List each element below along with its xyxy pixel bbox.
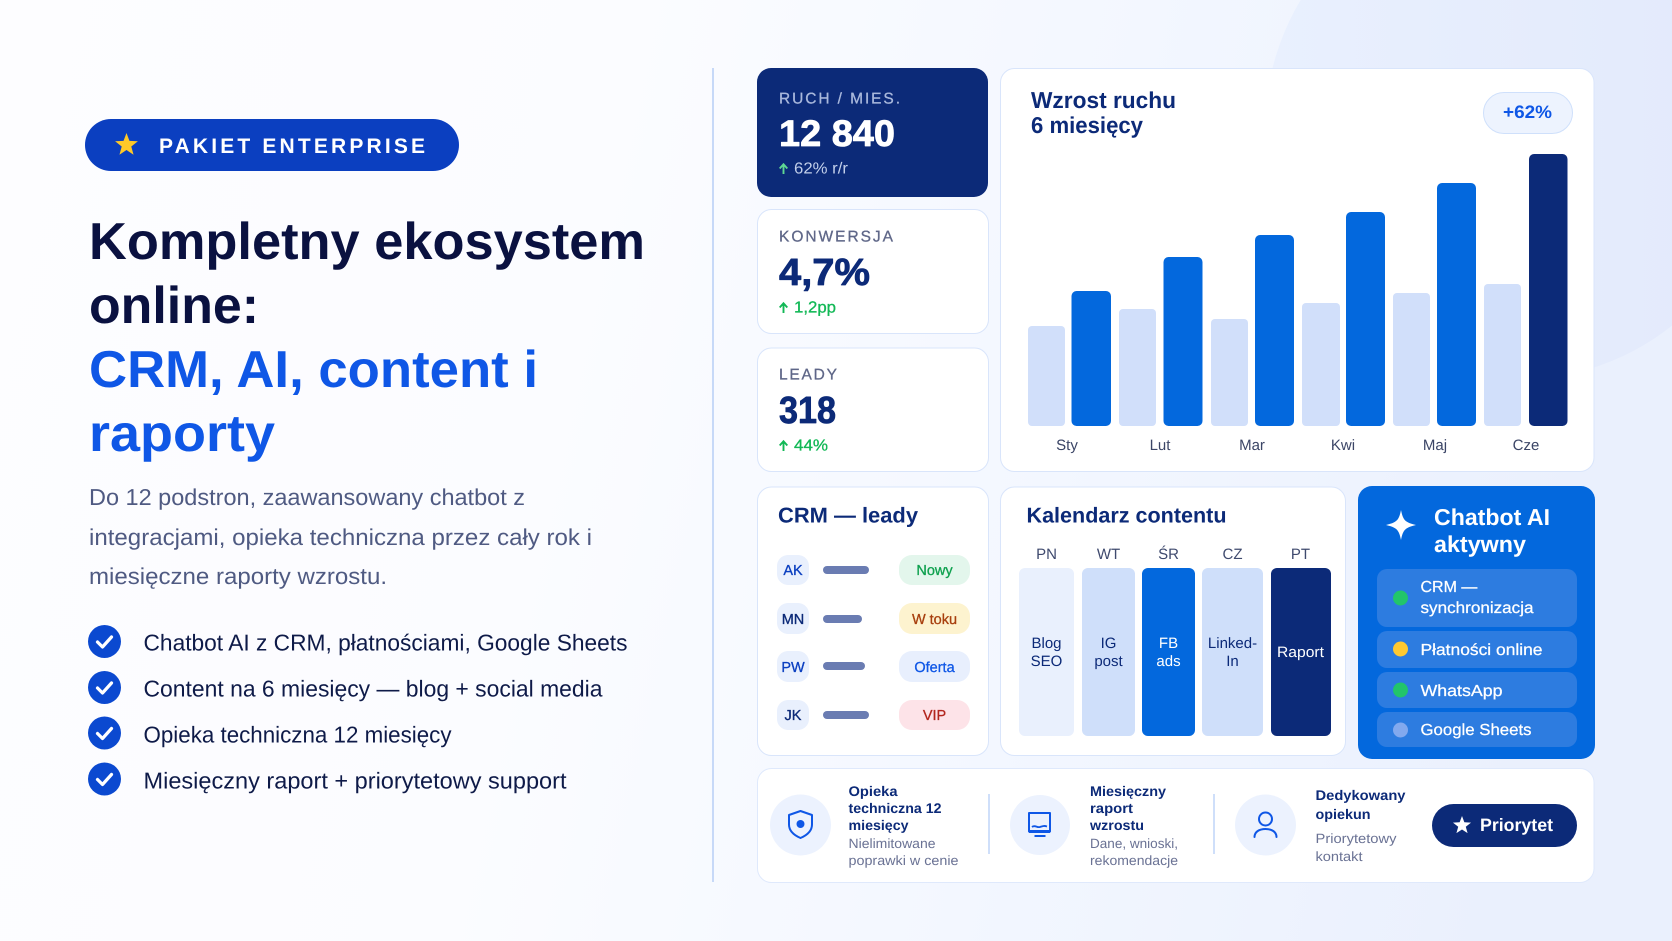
growth badge — [1484, 92, 1572, 134]
service: technical care: miesięcy — [848, 817, 909, 833]
column: IG post — [1082, 568, 1135, 736]
item: raport — [88, 762, 567, 796]
integration: payments — [1377, 631, 1577, 668]
column: Blog SEO: Blog — [1031, 635, 1062, 652]
integration: WhatsApp — [1377, 672, 1577, 708]
panel: CRM leads — [758, 487, 988, 756]
service: dedicated manager: opiekun — [1316, 806, 1370, 822]
weekday labels: PT — [1291, 546, 1310, 563]
KPI card: konwersja — [758, 210, 988, 334]
lead row AK — [777, 555, 970, 585]
item: chatbot: Chatbot AI z CRM, płatnościami, Google Sheets — [144, 630, 628, 656]
chatbot heading: aktywny — [1434, 531, 1526, 557]
integration: WhatsApp: WhatsApp — [1420, 683, 1503, 700]
KPI card: konwersja: 1,2pp — [794, 300, 836, 316]
service: monthly report: raport — [1090, 800, 1133, 816]
chart month labels: Lut — [1150, 437, 1171, 454]
chatbot heading — [1434, 504, 1550, 557]
chart heading: Wzrost ruchu — [1031, 87, 1176, 113]
chart month labels: Kwi — [1331, 437, 1355, 454]
description paragraph: miesięczne raporty wzrostu. — [89, 563, 387, 589]
lead row PW — [777, 651, 970, 682]
item: opieka: Opieka techniczna 12 miesięcy — [144, 722, 452, 748]
title: CRM, AI, content i — [89, 341, 538, 399]
service: monthly report: Miesięczny — [1090, 783, 1166, 799]
icon: person — [1254, 812, 1276, 837]
title — [89, 213, 645, 463]
service: technical care: techniczna 12 — [848, 800, 942, 816]
KPI card: leady: LEADY — [779, 366, 837, 384]
icon: sparkle — [1386, 510, 1416, 540]
badge: Pakiet Enterprise: PAKIET ENTERPRISE — [159, 135, 425, 158]
service: dedicated manager: Priorytetowy — [1316, 831, 1397, 846]
integration: Google Sheets: Google Sheets — [1420, 722, 1532, 739]
chart month labels: Cze — [1513, 437, 1539, 454]
column: FB ads: ads — [1156, 653, 1181, 670]
service: technical care: poprawki w cenie — [848, 853, 958, 868]
icon: gold star — [115, 133, 138, 155]
column: FB ads: FB — [1159, 635, 1178, 652]
column: Blog SEO: SEO — [1031, 653, 1062, 670]
KPI card: leady: 44% — [794, 438, 828, 454]
weekday labels: CZ — [1222, 546, 1242, 563]
panel: traffic growth chart — [1000, 68, 1594, 472]
title: online: — [89, 277, 259, 335]
CRM heading: CRM — leady — [778, 504, 918, 528]
column: LinkedIn: In — [1226, 653, 1239, 670]
priority button — [1432, 804, 1577, 847]
KPI card: leady: 318 — [779, 390, 836, 432]
lead row MN: W toku — [912, 612, 957, 628]
service: monthly report: rekomendacje — [1090, 853, 1178, 868]
item: opieka — [88, 716, 452, 750]
KPI card: leady — [758, 348, 988, 472]
badge: Pakiet Enterprise — [85, 119, 459, 171]
column: Raport — [1271, 568, 1331, 736]
lead row MN: MN — [782, 612, 804, 628]
chart month labels — [1056, 437, 1539, 454]
lead row PW: Oferta — [914, 660, 956, 676]
lead row PW: PW — [781, 660, 805, 676]
service: dedicated manager: kontakt — [1316, 849, 1363, 864]
column: IG post: IG — [1101, 635, 1116, 652]
lead row MN — [777, 603, 970, 634]
description paragraph: Do 12 podstron, zaawansowany chatbot z — [89, 484, 525, 510]
calendar heading: Kalendarz contentu — [1026, 504, 1226, 528]
description paragraph: integracjami, opieka techniczna przez cały rok i — [89, 524, 592, 550]
description paragraph — [89, 484, 592, 589]
bar chart — [1028, 154, 1568, 426]
chart heading — [1031, 87, 1176, 138]
chart month labels: Mar — [1239, 437, 1265, 454]
integration: CRM — [1377, 569, 1577, 627]
left column: intro — [85, 119, 645, 796]
chart month labels: Sty — [1056, 437, 1078, 454]
KPI card: konwersja: 4,7% — [779, 252, 870, 294]
weekday labels: WT — [1097, 546, 1120, 563]
priority button: Priorytet — [1480, 815, 1553, 835]
integration: Google Sheets — [1377, 712, 1577, 747]
service: monthly report: Dane, wnioski, — [1090, 836, 1178, 851]
service: technical care: Opieka — [848, 783, 898, 799]
column: LinkedIn: Linked- — [1208, 635, 1257, 652]
weekday labels: PN — [1036, 546, 1057, 563]
icon: shield — [789, 811, 812, 838]
chart heading: 6 miesięcy — [1031, 112, 1143, 138]
weekday labels — [1036, 545, 1310, 563]
chatbot heading: Chatbot AI — [1434, 504, 1550, 530]
KPI card: ruch: RUCH / MIES. — [779, 90, 900, 108]
service: dedicated manager: Dedykowany — [1316, 787, 1406, 803]
item: raport: Miesięczny raport + priorytetowy support — [144, 768, 567, 794]
KPI card: ruch: 12 840 — [779, 113, 895, 154]
lead row JK: JK — [785, 708, 802, 724]
weekday labels: ŚR — [1158, 545, 1179, 563]
column: IG post: post — [1094, 653, 1124, 670]
lead row AK: Nowy — [916, 563, 953, 579]
KPI card: ruch: 62% r/r — [794, 160, 849, 178]
lead row AK: AK — [783, 563, 803, 579]
lead row JK — [777, 700, 970, 730]
item: content: Content na 6 miesięcy — blog + social media — [144, 676, 603, 702]
title: Kompletny ekosystem — [89, 213, 645, 271]
integration: payments: Płatności online — [1420, 642, 1543, 659]
column: Raport: Raport — [1277, 644, 1325, 661]
feature checklist — [88, 625, 628, 796]
service: monthly report: wzrostu — [1089, 817, 1144, 833]
panel: content calendar — [1000, 487, 1346, 756]
integration: CRM: CRM — — [1420, 579, 1477, 596]
lead row JK: VIP — [923, 708, 946, 724]
chart month labels: Maj — [1423, 437, 1447, 454]
panel: bottom services strip — [758, 768, 1594, 882]
panel: chatbot AI — [1358, 486, 1595, 759]
service: technical care: Nielimitowane — [848, 836, 936, 851]
KPI card: ruch — [757, 68, 988, 197]
column: Blog SEO — [1019, 568, 1074, 736]
icon: chart monitor — [1029, 813, 1050, 836]
growth badge: +62% — [1503, 102, 1552, 122]
service: monthly report — [1010, 783, 1178, 868]
title: raporty — [89, 405, 275, 463]
column: LinkedIn — [1202, 568, 1263, 736]
column: FB ads — [1142, 568, 1195, 736]
service: dedicated manager — [1235, 787, 1406, 864]
integration: CRM: synchronizacja — [1420, 600, 1534, 617]
service: technical care — [770, 783, 958, 868]
KPI card: konwersja: KONWERSJA — [779, 228, 894, 246]
